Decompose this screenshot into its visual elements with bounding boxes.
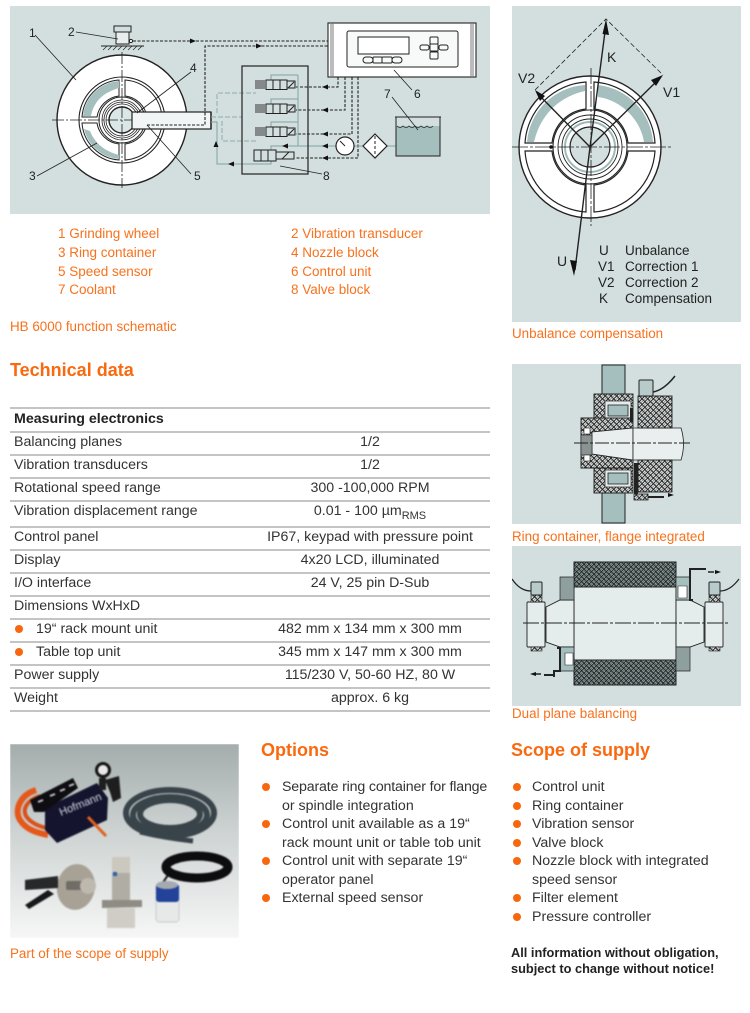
technical data table: 19“ rack mount unit: [36, 620, 157, 636]
icon: vibration transducer: [101, 26, 144, 50]
part numbers: 8: [323, 169, 330, 183]
technical data table: 345 mm x 147 mm x 300 mm: [278, 644, 462, 660]
vector labels: V2: [518, 70, 535, 86]
panel: ring container, flange integrated: [512, 364, 741, 524]
technical data table: Power supply: [14, 666, 99, 682]
options list: operator panel: [282, 872, 374, 888]
parts legend: 4 Nozzle block: [291, 245, 379, 260]
part numbers: 6: [414, 87, 421, 101]
options list: External speed sensor: [282, 890, 423, 906]
technical data table: 300 -100,000 RPM: [310, 480, 430, 496]
part numbers: 4: [190, 61, 197, 75]
technical data table: Weight: [14, 690, 58, 706]
options list: Control unit available as a 19“: [282, 816, 470, 832]
legend: vector definitions: Unbalance: [625, 243, 690, 258]
icon: ring container wheel: [512, 68, 671, 226]
heading: scope of supply: Scope of supply: [511, 740, 650, 760]
scope of supply list: speed sensor: [532, 872, 617, 888]
center line: [574, 442, 690, 444]
rotor body: [574, 562, 676, 685]
black sensor cable: [162, 856, 228, 884]
scope of supply list: Vibration sensor: [532, 816, 634, 832]
technical data table: Vibration displacement range: [14, 503, 198, 519]
icon: filter: [363, 134, 387, 158]
scope of supply list: Pressure controller: [532, 909, 651, 925]
legend: vector definitions: Correction 1: [625, 259, 699, 274]
part numbers: 2: [68, 25, 75, 39]
caption: function schematic: HB 6000 function schematic: [10, 319, 177, 334]
technical data table: 0.01 - 100 µmRMS: [314, 503, 426, 522]
legend: vector definitions: V1: [598, 259, 615, 274]
spindle and housing: [630, 396, 684, 500]
parts legend: 6 Control unit: [291, 264, 371, 279]
technical data table: Balancing planes: [14, 434, 122, 450]
valve block unit: Hofmann: [58, 791, 104, 819]
grinding wheel section: [602, 365, 625, 523]
photo: scope of supply parts: [10, 744, 239, 938]
legend: vector definitions: Compensation: [625, 291, 712, 306]
black hose coil: [126, 790, 214, 841]
vibration sensor: [156, 881, 179, 922]
part numbers: 5: [194, 169, 201, 183]
valve module: [102, 857, 142, 928]
icon: grinding wheel with ring container: [52, 52, 190, 188]
technical data table: 482 mm x 134 mm x 300 mm: [278, 620, 462, 636]
parts legend: 7 Coolant: [58, 282, 116, 297]
options list: Separate ring container for flange: [282, 779, 487, 795]
technical data table: Control panel: [14, 528, 98, 544]
caption: part of the scope of supply: Part of the scope of supply: [10, 946, 169, 961]
disclaimer: All information without obligation,: [511, 945, 719, 960]
shaft left: [512, 577, 574, 677]
technical data table: 4x20 LCD, illuminated: [301, 552, 439, 568]
part numbers: 1: [29, 26, 36, 40]
leader lines: [35, 32, 418, 176]
technical data table: IP67, keypad with pressure point: [267, 528, 473, 544]
vector labels: K: [607, 49, 617, 65]
flange section: [581, 394, 633, 493]
heading: options: Options: [261, 740, 329, 760]
center line: [523, 622, 728, 624]
valve block unit: [30, 762, 121, 843]
technical data table: Display: [14, 552, 61, 568]
vector labels: V1: [663, 84, 680, 100]
parts legend: 5 Speed sensor: [58, 264, 153, 279]
scope of supply list: Valve block: [532, 835, 604, 851]
legend: vector definitions: Correction 2: [625, 275, 699, 290]
panel: dual plane balancing: [512, 546, 741, 706]
technical data table: 24 V, 25 pin D-Sub: [311, 574, 429, 590]
icon: coolant tank: [395, 117, 441, 156]
parts legend: 1 Grinding wheel: [58, 226, 159, 241]
technical data table: Table top unit: [36, 644, 120, 660]
technical data table: 1/2: [360, 456, 380, 472]
parts legend: 2 Vibration transducer: [291, 226, 423, 241]
parts legend: 8 Valve block: [291, 282, 370, 297]
panel: unbalance compensation: [512, 6, 741, 322]
compensation dashed lines: [535, 19, 663, 90]
icon: pressure gauge: [336, 137, 354, 155]
disclaimer: subject to change without notice!: [511, 961, 714, 976]
vector labels: [518, 49, 680, 269]
vector labels: U: [557, 253, 567, 269]
technical data table: 1/2: [360, 434, 380, 450]
caption: dual plane balancing: Dual plane balancing: [512, 706, 637, 721]
scope of supply list: [513, 779, 709, 925]
legend: vector definitions: [598, 243, 712, 306]
legend: vector definitions: U: [599, 243, 609, 258]
parts legend: 3 Ring container: [58, 245, 156, 260]
shaft right: [676, 569, 739, 671]
part numbers: [29, 25, 421, 183]
scope of supply list: Filter element: [532, 890, 618, 906]
part numbers: 3: [29, 169, 36, 183]
scope of supply list: Ring container: [532, 798, 624, 814]
disclaimer: [511, 945, 719, 976]
heading: technical data: Technical data: [10, 360, 134, 380]
part numbers: 7: [384, 87, 391, 101]
photo background: [10, 744, 239, 938]
panel: HB 6000 function schematic: [10, 6, 490, 214]
vibration sensor: [639, 376, 675, 396]
caption: ring container: Ring container, flange integrated: [512, 529, 705, 544]
legend: vector definitions: V2: [598, 275, 615, 290]
nozzle block: [25, 861, 99, 913]
icon: nozzle block: [132, 112, 211, 129]
options list: or spindle integration: [282, 798, 414, 814]
options list: rack mount unit or table tob unit: [282, 835, 481, 851]
technical data table: 115/230 V, 50-60 HZ, 80 W: [285, 666, 455, 682]
technical data table: Measuring electronics: [14, 411, 164, 427]
icon: valve block: [242, 66, 308, 174]
technical data table: Vibration transducers: [14, 456, 148, 472]
technical data table: Dimensions WxHxD: [14, 598, 140, 614]
scope of supply list: Control unit: [532, 779, 605, 795]
icon: control unit: [328, 23, 476, 77]
legend: vector definitions: K: [599, 291, 608, 306]
technical data table: approx. 6 kg: [331, 690, 409, 706]
technical data table: [10, 407, 490, 712]
options list: Control unit with separate 19“: [282, 853, 467, 869]
caption: unbalance compensation: Unbalance compensation: [512, 326, 663, 341]
options list: [262, 779, 487, 906]
vector arrows: [535, 19, 663, 276]
signal and supply lines: [133, 38, 396, 166]
technical data table: I/O interface: [14, 574, 91, 590]
scope of supply list: Nozzle block with integrated: [532, 853, 709, 869]
orange hose: [18, 790, 48, 835]
parts legend: [58, 226, 423, 297]
technical data table: Rotational speed range: [14, 480, 161, 496]
